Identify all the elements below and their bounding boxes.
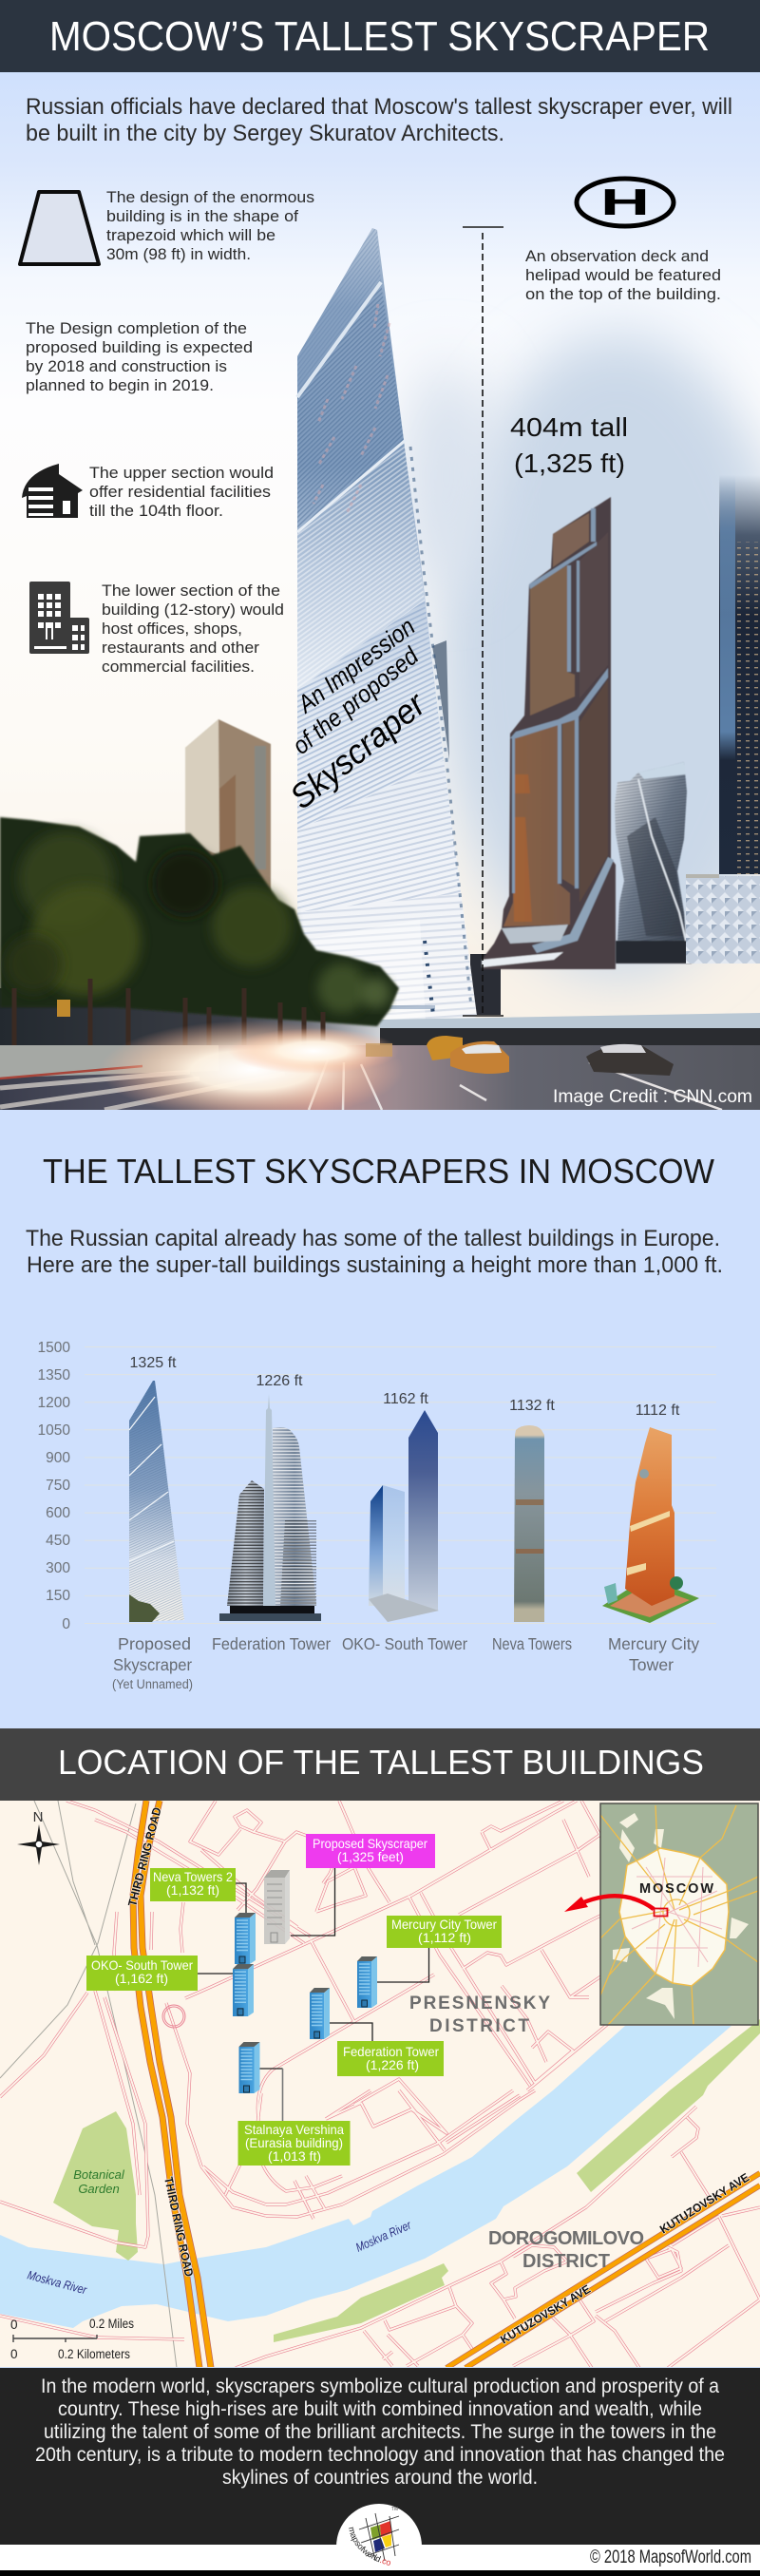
callout: oko south tower bbox=[86, 1956, 198, 1991]
icon: residential building bbox=[22, 464, 83, 518]
water and park labels: Garden bbox=[78, 2182, 120, 2196]
text: design completion: The Design completion of the bbox=[26, 320, 247, 337]
kutuzovsky ave bbox=[446, 2173, 760, 2368]
text: lower section bbox=[102, 582, 284, 676]
rear tall buildings bbox=[432, 640, 501, 1015]
district labels bbox=[409, 1994, 644, 2272]
inset locator map: MOSCOW bbox=[639, 1881, 713, 1897]
text: lower section: building (12-story) would bbox=[102, 601, 284, 619]
y axis labels: 1500 bbox=[38, 1340, 70, 1356]
building marker: proposed skyscraper bbox=[264, 1870, 290, 1944]
inset locator map bbox=[600, 1803, 758, 2025]
text: lower section: The lower section of the bbox=[102, 582, 280, 600]
building: oko south tower bbox=[369, 1410, 439, 1622]
main tower bbox=[297, 228, 477, 1021]
text: lower section: commercial facilities. bbox=[102, 658, 255, 676]
connector lines bbox=[198, 1868, 429, 2069]
heading: THE TALLEST SKYSCRAPERS IN MOSCOW bbox=[43, 1152, 714, 1191]
building: proposed skyscraper bbox=[129, 1381, 184, 1622]
cars bbox=[366, 1036, 674, 1076]
trees bbox=[0, 817, 399, 1045]
y axis labels: 0 bbox=[62, 1616, 70, 1632]
callout: neva towers bbox=[150, 1868, 236, 1901]
footer strip bbox=[0, 2545, 760, 2576]
text: upper section: The upper section would bbox=[89, 465, 274, 482]
y axis labels: 600 bbox=[46, 1505, 70, 1521]
scale bar: 0.2 Miles bbox=[89, 2317, 134, 2331]
closing text: In the modern world, skyscrapers symbolize cultural production and prosperity of a bbox=[41, 2376, 719, 2397]
callout: federation tower: (1,226 ft) bbox=[366, 2057, 419, 2072]
scale bar: 0 bbox=[10, 2347, 18, 2361]
value labels: 1226 ft bbox=[256, 1373, 303, 1389]
district labels: DISTRICT bbox=[522, 2251, 610, 2272]
parks bbox=[53, 2019, 760, 2342]
location banner: LOCATION OF THE TALLEST BUILDINGS bbox=[58, 1743, 704, 1782]
road labels: KUTUZOVSKY AVE bbox=[498, 2282, 593, 2347]
logo: TM bbox=[391, 2507, 398, 2512]
height marker bbox=[463, 227, 504, 1016]
category labels: Federation Tower bbox=[212, 1634, 331, 1653]
building: neva towers bbox=[514, 1425, 544, 1622]
callout: stalnaya vershina: (Eurasia building) bbox=[245, 2135, 343, 2150]
scale bar bbox=[11, 2318, 134, 2358]
value labels: 1325 ft bbox=[130, 1355, 177, 1371]
category labels: Proposed bbox=[118, 1634, 191, 1653]
logo bbox=[336, 2504, 422, 2566]
water and park labels bbox=[26, 2167, 413, 2298]
callout: proposed skyscraper bbox=[306, 1834, 435, 1868]
road labels: THIRD RING ROAD bbox=[162, 2176, 196, 2278]
text: design completion: proposed building is expected bbox=[26, 339, 253, 356]
icon: trapezoid bbox=[20, 192, 99, 264]
road labels bbox=[125, 1806, 751, 2347]
header band bbox=[0, 0, 760, 72]
water and park labels: Moskva River bbox=[353, 2218, 413, 2255]
category labels: Neva Towers bbox=[492, 1634, 572, 1653]
height label: 404m tall bbox=[510, 412, 628, 442]
small tower bbox=[185, 719, 271, 912]
intro paragraph: The Russian capital already has some of the tallest buildings in Europe. bbox=[26, 1226, 720, 1251]
icon: helipad bbox=[577, 179, 674, 226]
closing text: 20th century, is a tribute to modern technology and innovation that has changed the bbox=[35, 2444, 725, 2466]
callout: stalnaya vershina: Stalnaya Vershina bbox=[244, 2122, 344, 2137]
text: design completion: by 2018 and construction is bbox=[26, 358, 227, 375]
connector: stalnaya vershina bbox=[281, 2069, 283, 2121]
text: helipad bbox=[525, 248, 721, 303]
text: lower section: host offices, shops, bbox=[102, 620, 242, 638]
text: design completion: planned to begin in 2019. bbox=[26, 377, 214, 394]
y axis labels: 450 bbox=[46, 1533, 70, 1549]
overpass and street level bbox=[0, 988, 760, 1110]
text: upper section: till the 104th floor. bbox=[89, 503, 223, 520]
category labels bbox=[112, 1634, 699, 1691]
street network bbox=[0, 1801, 760, 2368]
callout: oko south tower: (1,162 ft) bbox=[115, 1971, 168, 1986]
y axis labels: 150 bbox=[46, 1588, 70, 1604]
category labels: (Yet Unnamed) bbox=[112, 1677, 193, 1691]
text: upper section: offer residential facilities bbox=[89, 484, 271, 501]
text: trapezoid design bbox=[106, 189, 314, 263]
icon: helipad: H bbox=[600, 182, 650, 223]
y axis labels: 300 bbox=[46, 1560, 70, 1576]
callout: stalnaya vershina bbox=[238, 2121, 350, 2166]
road labels: KUTUZOVSKY AVE bbox=[657, 2170, 751, 2237]
district labels: PRESNENSKY bbox=[409, 1994, 550, 2013]
tower caption: Skyscraper bbox=[282, 683, 434, 816]
y axis labels: 1350 bbox=[38, 1367, 70, 1383]
callout: oko south tower: OKO- South Tower bbox=[91, 1957, 193, 1973]
panel: hero image bbox=[0, 72, 760, 1119]
tower caption bbox=[282, 612, 434, 816]
text: trapezoid design: 30m (98 ft) in width. bbox=[106, 246, 251, 263]
scale bar: 0 bbox=[10, 2318, 18, 2332]
callout: neva towers: (1,132 ft) bbox=[166, 1882, 219, 1898]
height label: (1,325 ft) bbox=[514, 448, 625, 478]
category labels: OKO- South Tower bbox=[342, 1634, 467, 1653]
district labels: DISTRICT bbox=[429, 2016, 529, 2036]
location banner bbox=[0, 1728, 760, 1801]
callout: proposed skyscraper: Proposed Skyscraper bbox=[313, 1836, 428, 1851]
building markers: existing towers bbox=[233, 1913, 377, 2093]
value labels: 1112 ft bbox=[636, 1402, 680, 1419]
image credit: Image Credit : CNN.com bbox=[553, 1087, 752, 1107]
callout: mercury city tower: Mercury City Tower bbox=[391, 1917, 497, 1932]
callout: federation tower: Federation Tower bbox=[343, 2044, 439, 2059]
water and park labels: Moskva River bbox=[26, 2267, 88, 2298]
y axis labels: 1050 bbox=[38, 1422, 70, 1439]
icon: compass bbox=[17, 1809, 60, 1865]
text: helipad: on the top of the building. bbox=[525, 286, 721, 303]
text: trapezoid design: trapezoid which will be bbox=[106, 227, 276, 244]
cladding block bbox=[686, 876, 760, 964]
text: trapezoid design: building is in the shape of bbox=[106, 208, 298, 225]
text: upper section bbox=[89, 465, 274, 520]
title: MOSCOW’S TALLEST SKYSCRAPER bbox=[49, 13, 710, 60]
height label bbox=[510, 412, 628, 478]
intro text: be built in the city by Sergey Skuratov Architects. bbox=[26, 121, 504, 146]
logo: mapsofworld.com bbox=[349, 2528, 390, 2566]
value labels: 1132 ft bbox=[509, 1398, 555, 1414]
tower caption: An Impression bbox=[291, 612, 420, 719]
category labels: Tower bbox=[629, 1655, 674, 1674]
closing text: utilizing the talent of some of the brilliant architects. The surge in the towers in the bbox=[44, 2421, 716, 2443]
intro text bbox=[26, 94, 732, 146]
building: federation tower bbox=[219, 1394, 321, 1621]
callout: federation tower bbox=[337, 2041, 444, 2076]
callout: mercury city tower: (1,112 ft) bbox=[418, 1930, 471, 1945]
text: trapezoid design: The design of the enormous bbox=[106, 189, 314, 206]
category labels: Mercury City bbox=[608, 1634, 699, 1653]
category labels: Skyscraper bbox=[113, 1655, 192, 1674]
water and park labels: Botanical bbox=[73, 2167, 125, 2182]
Evolution tower bbox=[615, 762, 692, 964]
district labels: DOROGOMILOVO bbox=[488, 2228, 644, 2249]
callout: proposed skyscraper: (1,325 feet) bbox=[337, 1849, 404, 1864]
panel: tallest skyscrapers bbox=[0, 1110, 760, 1728]
closing panel bbox=[0, 2367, 760, 2545]
closing text bbox=[35, 2376, 725, 2489]
closing text: skylines of countries around the world. bbox=[222, 2467, 538, 2489]
Mercury City tower hero bbox=[482, 497, 616, 969]
callout: stalnaya vershina: (1,013 ft) bbox=[268, 2148, 321, 2164]
tower caption: of the proposed bbox=[287, 640, 425, 760]
scale bar: 0.2 Kilometers bbox=[58, 2347, 130, 2361]
callout: mercury city tower bbox=[387, 1916, 502, 1948]
thin rail lines bbox=[0, 1801, 177, 2368]
text: design completion bbox=[26, 320, 253, 394]
third ring road bbox=[133, 1801, 211, 2368]
value labels: 1162 ft bbox=[383, 1391, 428, 1407]
intro paragraph: Here are the super-tall buildings sustaining a height more than 1,000 ft. bbox=[27, 1252, 723, 1278]
text: helipad: An observation deck and bbox=[525, 248, 709, 265]
road labels: THIRD RING ROAD bbox=[125, 1806, 164, 1908]
text: lower section: restaurants and other bbox=[102, 639, 260, 657]
text: helipad: helipad would be featured bbox=[525, 267, 721, 284]
closing text: country. These high-rises are built with combined innovation and wealth, while bbox=[58, 2398, 702, 2420]
value labels bbox=[130, 1355, 680, 1419]
bar chart bbox=[38, 1340, 716, 1691]
panel: map bbox=[0, 1801, 760, 2368]
callout: neva towers: Neva Towers 2 bbox=[153, 1869, 233, 1884]
y axis labels: 1200 bbox=[38, 1395, 70, 1411]
river bbox=[0, 2026, 732, 2328]
y axis labels: 750 bbox=[46, 1478, 70, 1494]
y axis labels bbox=[38, 1340, 70, 1632]
arrow: locator bbox=[564, 1896, 654, 1912]
icon: office building bbox=[29, 582, 89, 654]
intro paragraph bbox=[26, 1226, 723, 1278]
intro text: Russian officials have declared that Moscow's tallest skyscraper ever, will bbox=[26, 94, 732, 120]
building: mercury city tower bbox=[602, 1427, 699, 1623]
icon: compass: N bbox=[33, 1809, 43, 1825]
sun flare bbox=[104, 1022, 396, 1110]
y axis labels: 900 bbox=[46, 1450, 70, 1466]
